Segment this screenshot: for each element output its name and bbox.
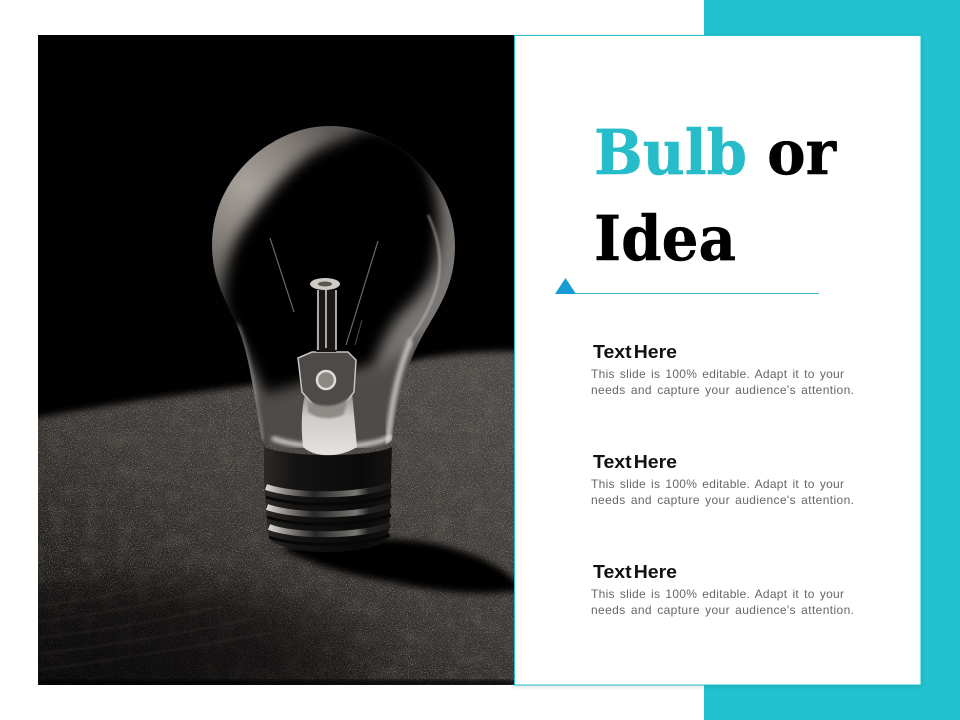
screw base — [264, 447, 392, 552]
glass stem — [298, 278, 357, 455]
title — [594, 116, 837, 275]
title: Bulb or — [594, 116, 837, 189]
text block 2: needs and capture your audience's attention. — [591, 493, 854, 507]
filament support wires — [270, 238, 378, 345]
text block 3: Text Here — [593, 562, 677, 582]
text block 3: This slide is 100% editable. Adapt it to your — [591, 587, 844, 601]
carpet ribs — [40, 612, 234, 670]
teal background block — [704, 0, 960, 720]
photo: light bulb on dark textured surface — [38, 35, 522, 686]
text block 3 — [591, 562, 854, 617]
text block 2: This slide is 100% editable. Adapt it to your — [591, 477, 844, 491]
divider with triangle marker — [555, 278, 819, 294]
text block 2 — [591, 452, 854, 507]
white content card — [514, 36, 921, 685]
bulb glass — [212, 126, 455, 456]
text block 1: Text Here — [593, 342, 677, 362]
dark core — [224, 128, 440, 396]
text block 3: needs and capture your audience's attention. — [591, 603, 854, 617]
text block 1: needs and capture your audience's attention. — [591, 383, 854, 397]
text block 1 — [591, 342, 854, 397]
text block 2: Text Here — [593, 452, 677, 472]
textured ground — [38, 340, 522, 686]
cast shadow — [280, 539, 522, 593]
text block 1: This slide is 100% editable. Adapt it to your — [591, 367, 844, 381]
title: Idea — [594, 202, 736, 275]
